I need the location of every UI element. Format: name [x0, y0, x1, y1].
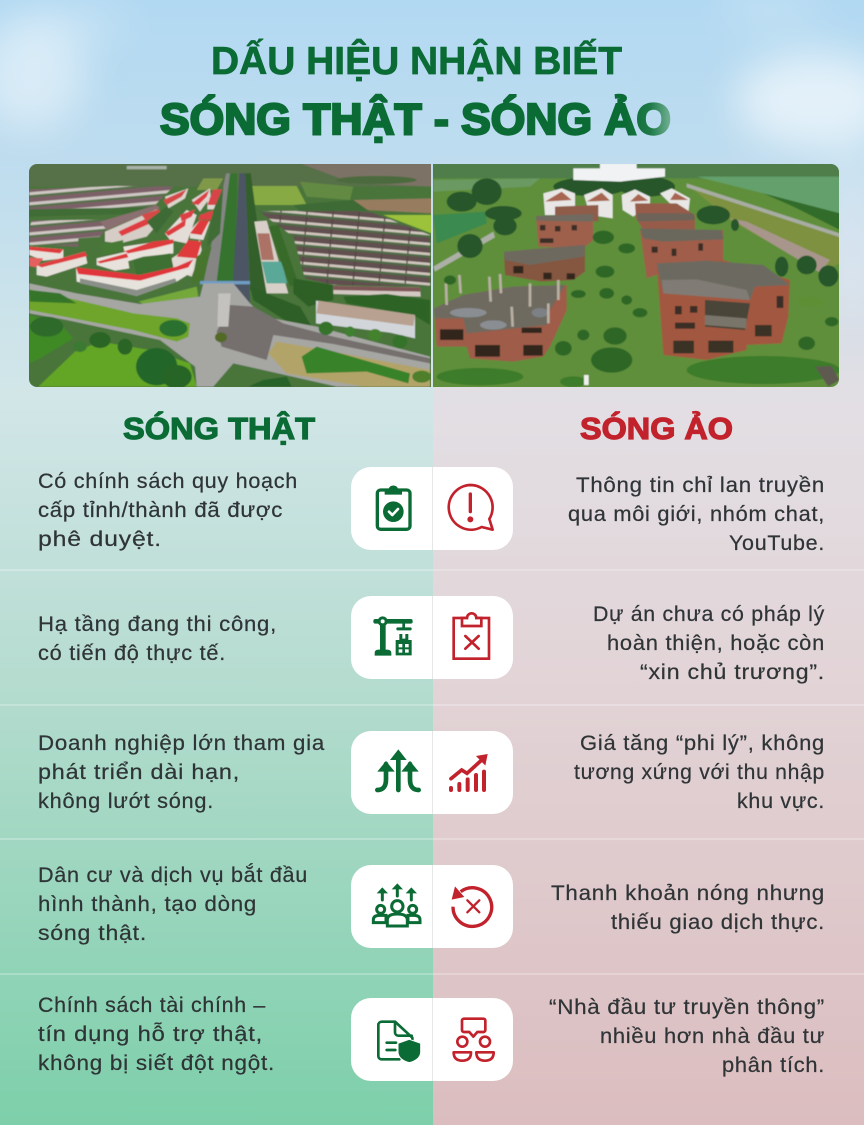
text: fake wave sign 4 — [551, 882, 825, 934]
right estate — [258, 211, 430, 287]
shrubs — [444, 231, 838, 373]
icon: clipboard with check — [377, 485, 410, 529]
text: real wave sign 3 — [38, 732, 325, 813]
icon cards — [351, 467, 513, 1081]
text: fake wave sign 5: nhiều hơn nhà đầu tư — [600, 1025, 825, 1048]
avenue — [204, 172, 230, 282]
text: fake wave sign 2: Dự án chưa có pháp lý — [593, 603, 825, 626]
icon: rising price chart — [451, 754, 488, 790]
text: fake wave sign 1: YouTube. — [729, 532, 825, 555]
medians — [29, 289, 190, 342]
icon: countdown clock with cross — [452, 886, 492, 926]
text: fake wave sign 3 — [574, 732, 825, 813]
text: real wave sign 1 — [38, 470, 298, 551]
text: fake wave sign 1: Thông tin chỉ lan truyền — [576, 474, 825, 497]
text: fake wave sign 1 — [568, 474, 825, 555]
text: fake wave sign 3: Giá tăng “phi lý”, không — [580, 732, 825, 755]
text: real wave sign 5: không bị siết đột ngột. — [38, 1052, 275, 1075]
photo: real estate development with completed streets — [27, 160, 437, 390]
text: fake wave sign 2 — [593, 603, 825, 684]
tree clusters — [447, 177, 838, 287]
column heading: fake wave: SÓNG ẢO — [580, 410, 733, 446]
brick blocks back — [434, 203, 790, 362]
upper left houses — [29, 186, 173, 210]
text: fake wave sign 4: thiếu giao dịch thực. — [611, 911, 825, 934]
text: real wave sign 2 — [38, 613, 277, 665]
text: real wave sign 3: phát triển dài hạn, — [38, 761, 240, 784]
text: fake wave sign 2: “xin chủ trương”. — [640, 661, 825, 684]
title — [160, 39, 671, 144]
text: real wave sign 1: Có chính sách quy hoạch — [38, 470, 298, 493]
text: fake wave sign 2: hoàn thiện, hoặc còn — [607, 632, 825, 655]
text: real wave sign 2: có tiến độ thực tế. — [38, 642, 226, 665]
text: real wave sign 1: phê duyệt. — [38, 528, 162, 551]
text: real wave sign 4 — [38, 864, 308, 945]
icon: clipboard with cross — [454, 613, 489, 659]
icon: alert speech bubble — [449, 485, 493, 530]
text: fake wave sign 4: Thanh khoản nóng nhưng — [551, 882, 825, 905]
icon: document with shield — [378, 1022, 421, 1063]
text: real wave sign 4: Dân cư và dịch vụ bắt đầu — [38, 864, 308, 887]
main road junction — [29, 283, 430, 387]
red roof blocks — [29, 188, 223, 296]
title: SÓNG THẬT - SÓNG ẢO — [160, 94, 671, 144]
text: fake wave sign 3: tương xứng với thu nhập — [574, 761, 825, 784]
title: DẤU HIỆU NHẬN BIẾT — [211, 39, 622, 83]
text: real wave sign 2: Hạ tầng đang thi công, — [38, 613, 277, 636]
text: fake wave sign 3: khu vực. — [737, 790, 825, 813]
text: fake wave sign 5 — [549, 996, 825, 1077]
icon: construction crane and building — [373, 616, 413, 656]
text: real wave sign 1: cấp tỉnh/thành đã được — [38, 499, 283, 522]
icon: community with rising arrows — [373, 883, 420, 926]
white building — [316, 301, 415, 338]
photo: abandoned unfinished villas — [430, 160, 843, 390]
icon: three rising arrows — [377, 749, 419, 790]
text: real wave sign 5: tín dụng hỗ trợ thật, — [38, 1023, 263, 1046]
icon: people with speech bubble — [454, 1019, 494, 1061]
row separators — [0, 570, 864, 974]
text: real wave sign 5 — [38, 994, 275, 1075]
text: fake wave sign 5: “Nhà đầu tư truyền thông” — [549, 996, 825, 1019]
text: real wave sign 5: Chính sách tài chính – — [38, 994, 266, 1017]
text: real wave sign 4: hình thành, tạo dòng — [38, 893, 257, 916]
text: real wave sign 3: Doanh nghiệp lớn tham gia — [38, 732, 325, 755]
text: fake wave sign 1: qua môi giới, nhóm chat, — [568, 503, 825, 526]
text: fake wave sign 5: phân tích. — [722, 1054, 825, 1077]
text: real wave sign 4: sóng thật. — [38, 922, 147, 945]
text: real wave sign 3: không lướt sóng. — [38, 790, 214, 813]
white houses — [543, 188, 690, 218]
column heading: real wave: SÓNG THẬT — [123, 410, 315, 446]
